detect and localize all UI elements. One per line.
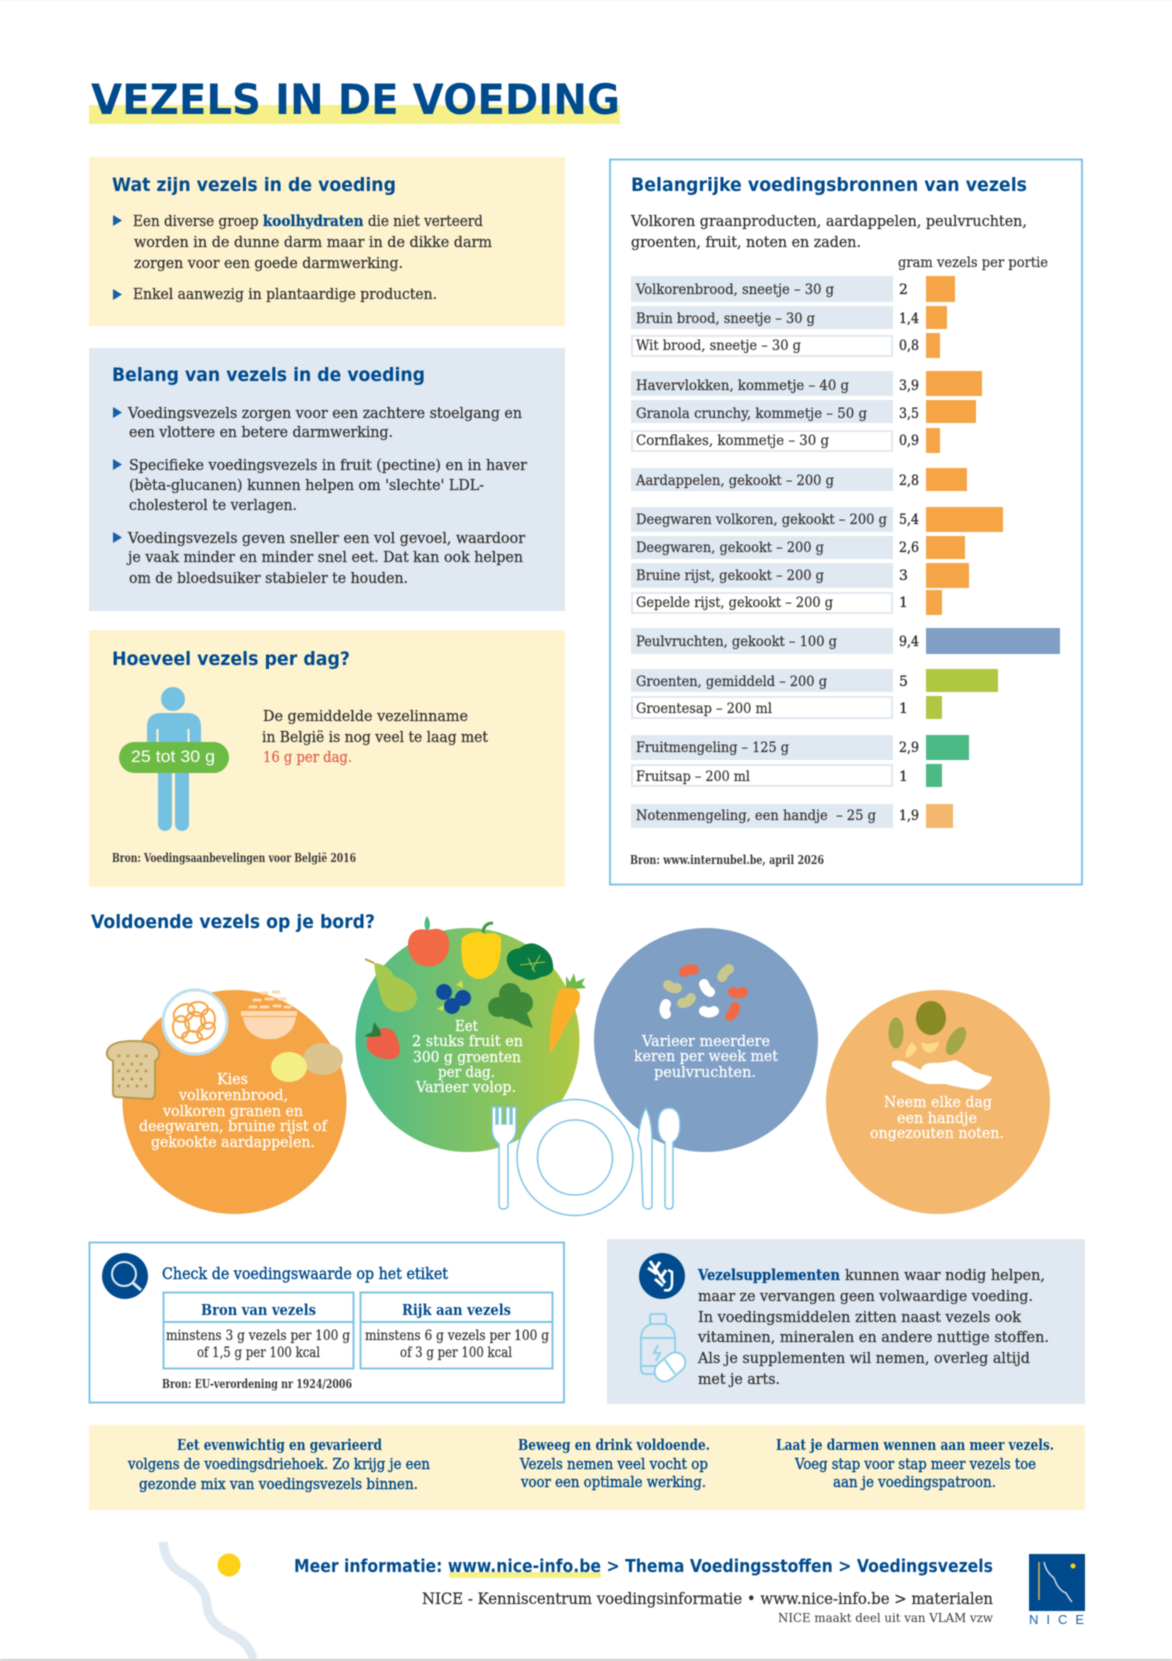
table: bron van vezels: minstens 3 g vezels per 100 g [166, 1328, 350, 1344]
icon: blueberries [436, 980, 471, 1014]
bar chart: Fruitmengeling – 125 g [636, 740, 789, 756]
panel: wat zijn vezels [89, 157, 565, 326]
circle: peulvruchten [594, 928, 818, 1152]
heading: belang: Belang van vezels in de voeding [112, 364, 425, 386]
icon: pear [365, 959, 417, 1012]
bullet list: een vlottere en betere darmwerking. [129, 423, 393, 441]
bullet list [113, 404, 528, 587]
tip: darmen wennen: aan je voedingspatroon. [833, 1475, 996, 1491]
bar chart: Cornflakes, kommetje – 30 g [636, 433, 829, 449]
text: granen: volkoren granen en [162, 1102, 303, 1120]
bar chart: 9,4 [899, 634, 919, 650]
icon: hand [892, 1060, 992, 1090]
bar chart: Granola crunchy, kommetje – 50 g [636, 406, 867, 422]
bar chart: Groentesap – 200 ml [636, 701, 772, 717]
text: noten: ongezouten noten. [870, 1124, 1004, 1142]
icon: apple [408, 916, 449, 966]
text: groenten en fruit: 2 stuks fruit en [412, 1032, 523, 1050]
footer: vlam line: NICE maakt deel uit van VLAM vzw [778, 1610, 993, 1625]
bar chart: 3,9 [899, 378, 919, 394]
table: bron van vezels [164, 1292, 354, 1368]
bar chart: 1 [899, 701, 908, 717]
text: supplementen: Vezelsupplementen [697, 1266, 840, 1284]
text: noten: Neem elke dag [884, 1093, 992, 1111]
icon: strawberry [364, 1022, 400, 1059]
icon: person with 25 tot 30 g: 25 tot 30 g [131, 747, 215, 766]
bar chart: Deegwaren volkoren, gekookt – 200 g [636, 512, 887, 528]
footer: more information: Meer informatie: www.nice-info.be > Thema Voedingsstoffen > Voedingsvezels [294, 1556, 993, 1577]
text: noten [870, 1093, 1004, 1142]
bar chart: Gepelde rijst, gekookt – 200 g [636, 595, 833, 611]
bar chart: 0,8 [899, 338, 919, 354]
icon: beans [664, 969, 743, 1016]
source: Bron: www.internubel.be, april 2026 [630, 852, 824, 867]
text: peulvruchten: peulvruchten. [654, 1063, 756, 1081]
table: rijk aan vezels: Rijk aan vezels [402, 1302, 511, 1319]
icon: spaghetti plate [163, 990, 227, 1054]
icon: nuts [888, 1001, 970, 1058]
text: groenten en fruit: 300 g groenten [413, 1048, 521, 1066]
tip: darmen wennen: Laat je darmen wennen aan meer vezels. [776, 1437, 1054, 1454]
text: gemiddelde vezelinname [262, 707, 488, 766]
text: supplementen: In voedingsmiddelen zitten naast vezels ook [698, 1308, 1022, 1326]
bullet list: cholesterol te verlagen. [129, 496, 297, 514]
heading: check: Check de voedingswaarde op het etiket [162, 1265, 449, 1283]
tip: evenwichtig eten [127, 1437, 430, 1493]
decorative wave and sun [163, 1542, 253, 1659]
bullet list: je vaak minder en minder snel eet. Dat kan ook helpen [126, 548, 523, 566]
text: gemiddelde vezelinname: 16 g per dag. [263, 748, 352, 766]
table: bron van vezels: Bron van vezels [201, 1302, 316, 1319]
table: rijk aan vezels: of 3 g per 100 kcal [400, 1345, 512, 1361]
icon: bread [107, 1041, 159, 1099]
panel: check voedingswaarde [90, 1242, 564, 1402]
text: granen [139, 1070, 328, 1151]
text: noten: een handje [897, 1109, 977, 1127]
icon: bottle and pill [641, 1314, 689, 1386]
bar chart: Volkorenbrood, sneetje – 30 g [635, 282, 834, 298]
panel: vezelsupplementen [607, 1239, 1085, 1404]
panel: hoeveel vezels per dag [89, 630, 565, 887]
bar chart: 1 [899, 595, 908, 611]
bullet list: worden in de dunne darm maar in de dikke darm [134, 233, 492, 251]
bar chart: Bruine rijst, gekookt – 200 g [636, 568, 824, 584]
table: rijk aan vezels [360, 1292, 552, 1368]
bar chart: 0,9 [899, 433, 919, 449]
bar chart: Fruitsap – 200 ml [636, 769, 750, 785]
intro text: Volkoren graanproducten, aardappelen, peulvruchten, [630, 212, 1027, 230]
icon: leafy vegetable [507, 943, 553, 980]
text: supplementen: met je arts. [698, 1370, 780, 1388]
text: peulvruchten: Varieer meerdere [641, 1032, 770, 1050]
icon: potatoes [271, 1043, 343, 1082]
source: Bron: Voedingsaanbevelingen voor België 2016 [112, 850, 356, 865]
bar chart: 5,4 [899, 512, 919, 528]
bar chart: Deegwaren, gekookt – 200 g [636, 540, 824, 556]
tip: bewegen en drinken: Vezels nemen veel vocht op [519, 1457, 708, 1473]
text: groenten en fruit [412, 1017, 523, 1096]
bar chart: Groenten, gemiddeld – 200 g [636, 674, 827, 690]
text: peulvruchten: keren per week met [634, 1047, 778, 1065]
tip: evenwichtig eten: volgens de voedingsdriehoek. Zo krijg je een [127, 1457, 430, 1473]
bar chart: 2,8 [899, 473, 919, 489]
icon: wheat in hand [639, 1253, 685, 1299]
circle: granen [107, 990, 346, 1214]
tip: evenwichtig eten: Eet evenwichtig en gevarieerd [177, 1437, 382, 1454]
tip: evenwichtig eten: gezonde mix van voedingsvezels binnen. [139, 1477, 418, 1493]
source: Bron: EU-verordening nr 1924/2006 [162, 1376, 352, 1391]
heading: voldoende vezels op je bord: Voldoende vezels op je bord? [91, 911, 375, 933]
icon: magnifier [102, 1253, 148, 1299]
bar chart [631, 276, 1060, 828]
bullet list: zorgen voor een goede darmwerking. [134, 254, 403, 272]
text: supplementen: vitaminen, mineralen en andere nuttige stoffen. [697, 1328, 1049, 1346]
bullet list: Enkel aanwezig in plantaardige producten. [133, 285, 437, 303]
axis label: gram vezels per portie [898, 255, 1048, 271]
bar chart: Peulvruchten, gekookt – 100 g [636, 634, 837, 650]
bar chart: 5 [899, 674, 908, 690]
text: supplementen [697, 1266, 1049, 1388]
bar chart: Bruin brood, sneetje – 30 g [636, 311, 815, 327]
bar chart: Wit brood, sneetje – 30 g [636, 338, 801, 354]
panel: belang van vezels [89, 348, 565, 611]
bar chart: 2 [899, 282, 908, 298]
text: gemiddelde vezelinname: De gemiddelde vezelinname [263, 707, 468, 725]
intro text [630, 212, 1027, 251]
bullet list: (bèta-glucanen) kunnen helpen om 'slechte' LDL- [129, 476, 484, 494]
tip: bewegen en drinken: voor een optimale werking. [520, 1475, 706, 1491]
icon: person with 25 tot 30 g [119, 687, 229, 831]
bullet list: Voedingsvezels zorgen voor een zachtere stoelgang en [127, 404, 522, 422]
table: rijk aan vezels: minstens 6 g vezels per 100 g [365, 1328, 549, 1344]
bar chart: 2,6 [899, 540, 919, 556]
text: granen: deegwaren, bruine rijst of [139, 1117, 328, 1135]
text: supplementen: maar ze vervangen geen volwaardige voeding. [698, 1287, 1033, 1305]
bullet list: Een diverse groep koolhydraten die niet verteerd [133, 212, 483, 230]
circle: groenten en fruit [356, 916, 586, 1152]
logo: NICE: NICE [1029, 1612, 1084, 1627]
panel: voedingsbronnen [610, 160, 1082, 884]
text: granen: Kies [217, 1070, 248, 1088]
tip: darmen wennen [776, 1437, 1054, 1491]
bullet list [113, 212, 492, 303]
tip: darmen wennen: Voeg stap voor stap meer vezels toe [794, 1457, 1036, 1473]
title: VEZELS IN DE VOEDING [91, 75, 620, 124]
text: groenten en fruit: Eet [455, 1017, 478, 1035]
bar chart: 1 [899, 769, 908, 785]
text: gemiddelde vezelinname: in België is nog veel te laag met [262, 728, 488, 746]
text: granen: gekookte aardappelen. [151, 1133, 315, 1151]
bar chart: 3,5 [899, 406, 919, 422]
bar chart: 1,9 [899, 808, 919, 824]
bar chart: 1,4 [899, 311, 919, 327]
icon: carrot [550, 973, 586, 1055]
bullet list: Specifieke voedingsvezels in fruit (pectine) en in haver [129, 456, 528, 474]
bar chart: 3 [899, 568, 908, 584]
heading: hoeveel: Hoeveel vezels per dag? [112, 648, 350, 670]
heading: voedingsbronnen: Belangrijke voedingsbronnen van vezels [631, 174, 1027, 196]
text: granen: volkorenbrood, [178, 1086, 288, 1104]
text: supplementen: kunnen waar nodig helpen, [845, 1266, 1045, 1284]
intro text: groenten, fruit, noten en zaden. [631, 233, 861, 251]
table: bron van vezels: of 1,5 g per 100 kcal [197, 1345, 320, 1361]
bar chart: 2,9 [899, 740, 919, 756]
panel: tips [89, 1425, 1085, 1510]
text: supplementen: Als je supplementen wil nemen, overleg altijd [697, 1349, 1030, 1367]
icon: bowl with grains [241, 992, 297, 1039]
footer: organisation line: NICE - Kenniscentrum voedingsinformatie • www.nice-info.be > materialen [422, 1589, 993, 1608]
text: groenten en fruit: Varieer volop. [415, 1078, 516, 1096]
bar chart: Notenmengeling, een handje – 25 g [636, 808, 876, 824]
tip: bewegen en drinken: Beweeg en drink voldoende. [518, 1437, 710, 1454]
tip: bewegen en drinken [518, 1437, 710, 1491]
icon: broccoli [488, 983, 533, 1028]
bar chart: Aardappelen, gekookt – 200 g [635, 473, 834, 489]
bar chart: Havervlokken, kommetje – 40 g [636, 378, 849, 394]
heading: wat zijn vezels: Wat zijn vezels in de voeding [112, 174, 396, 196]
bullet list: om de bloedsuiker stabieler te houden. [129, 569, 408, 587]
icon: bell pepper [461, 923, 501, 979]
circle: noten [826, 990, 1050, 1214]
logo: NICE [1029, 1554, 1085, 1627]
bullet list: Voedingsvezels geven sneller een vol gevoel, waardoor [127, 529, 526, 547]
text: groenten en fruit: per dag. [438, 1063, 495, 1081]
icon: plate and cutlery [492, 1100, 680, 1216]
text: peulvruchten [634, 1032, 778, 1081]
